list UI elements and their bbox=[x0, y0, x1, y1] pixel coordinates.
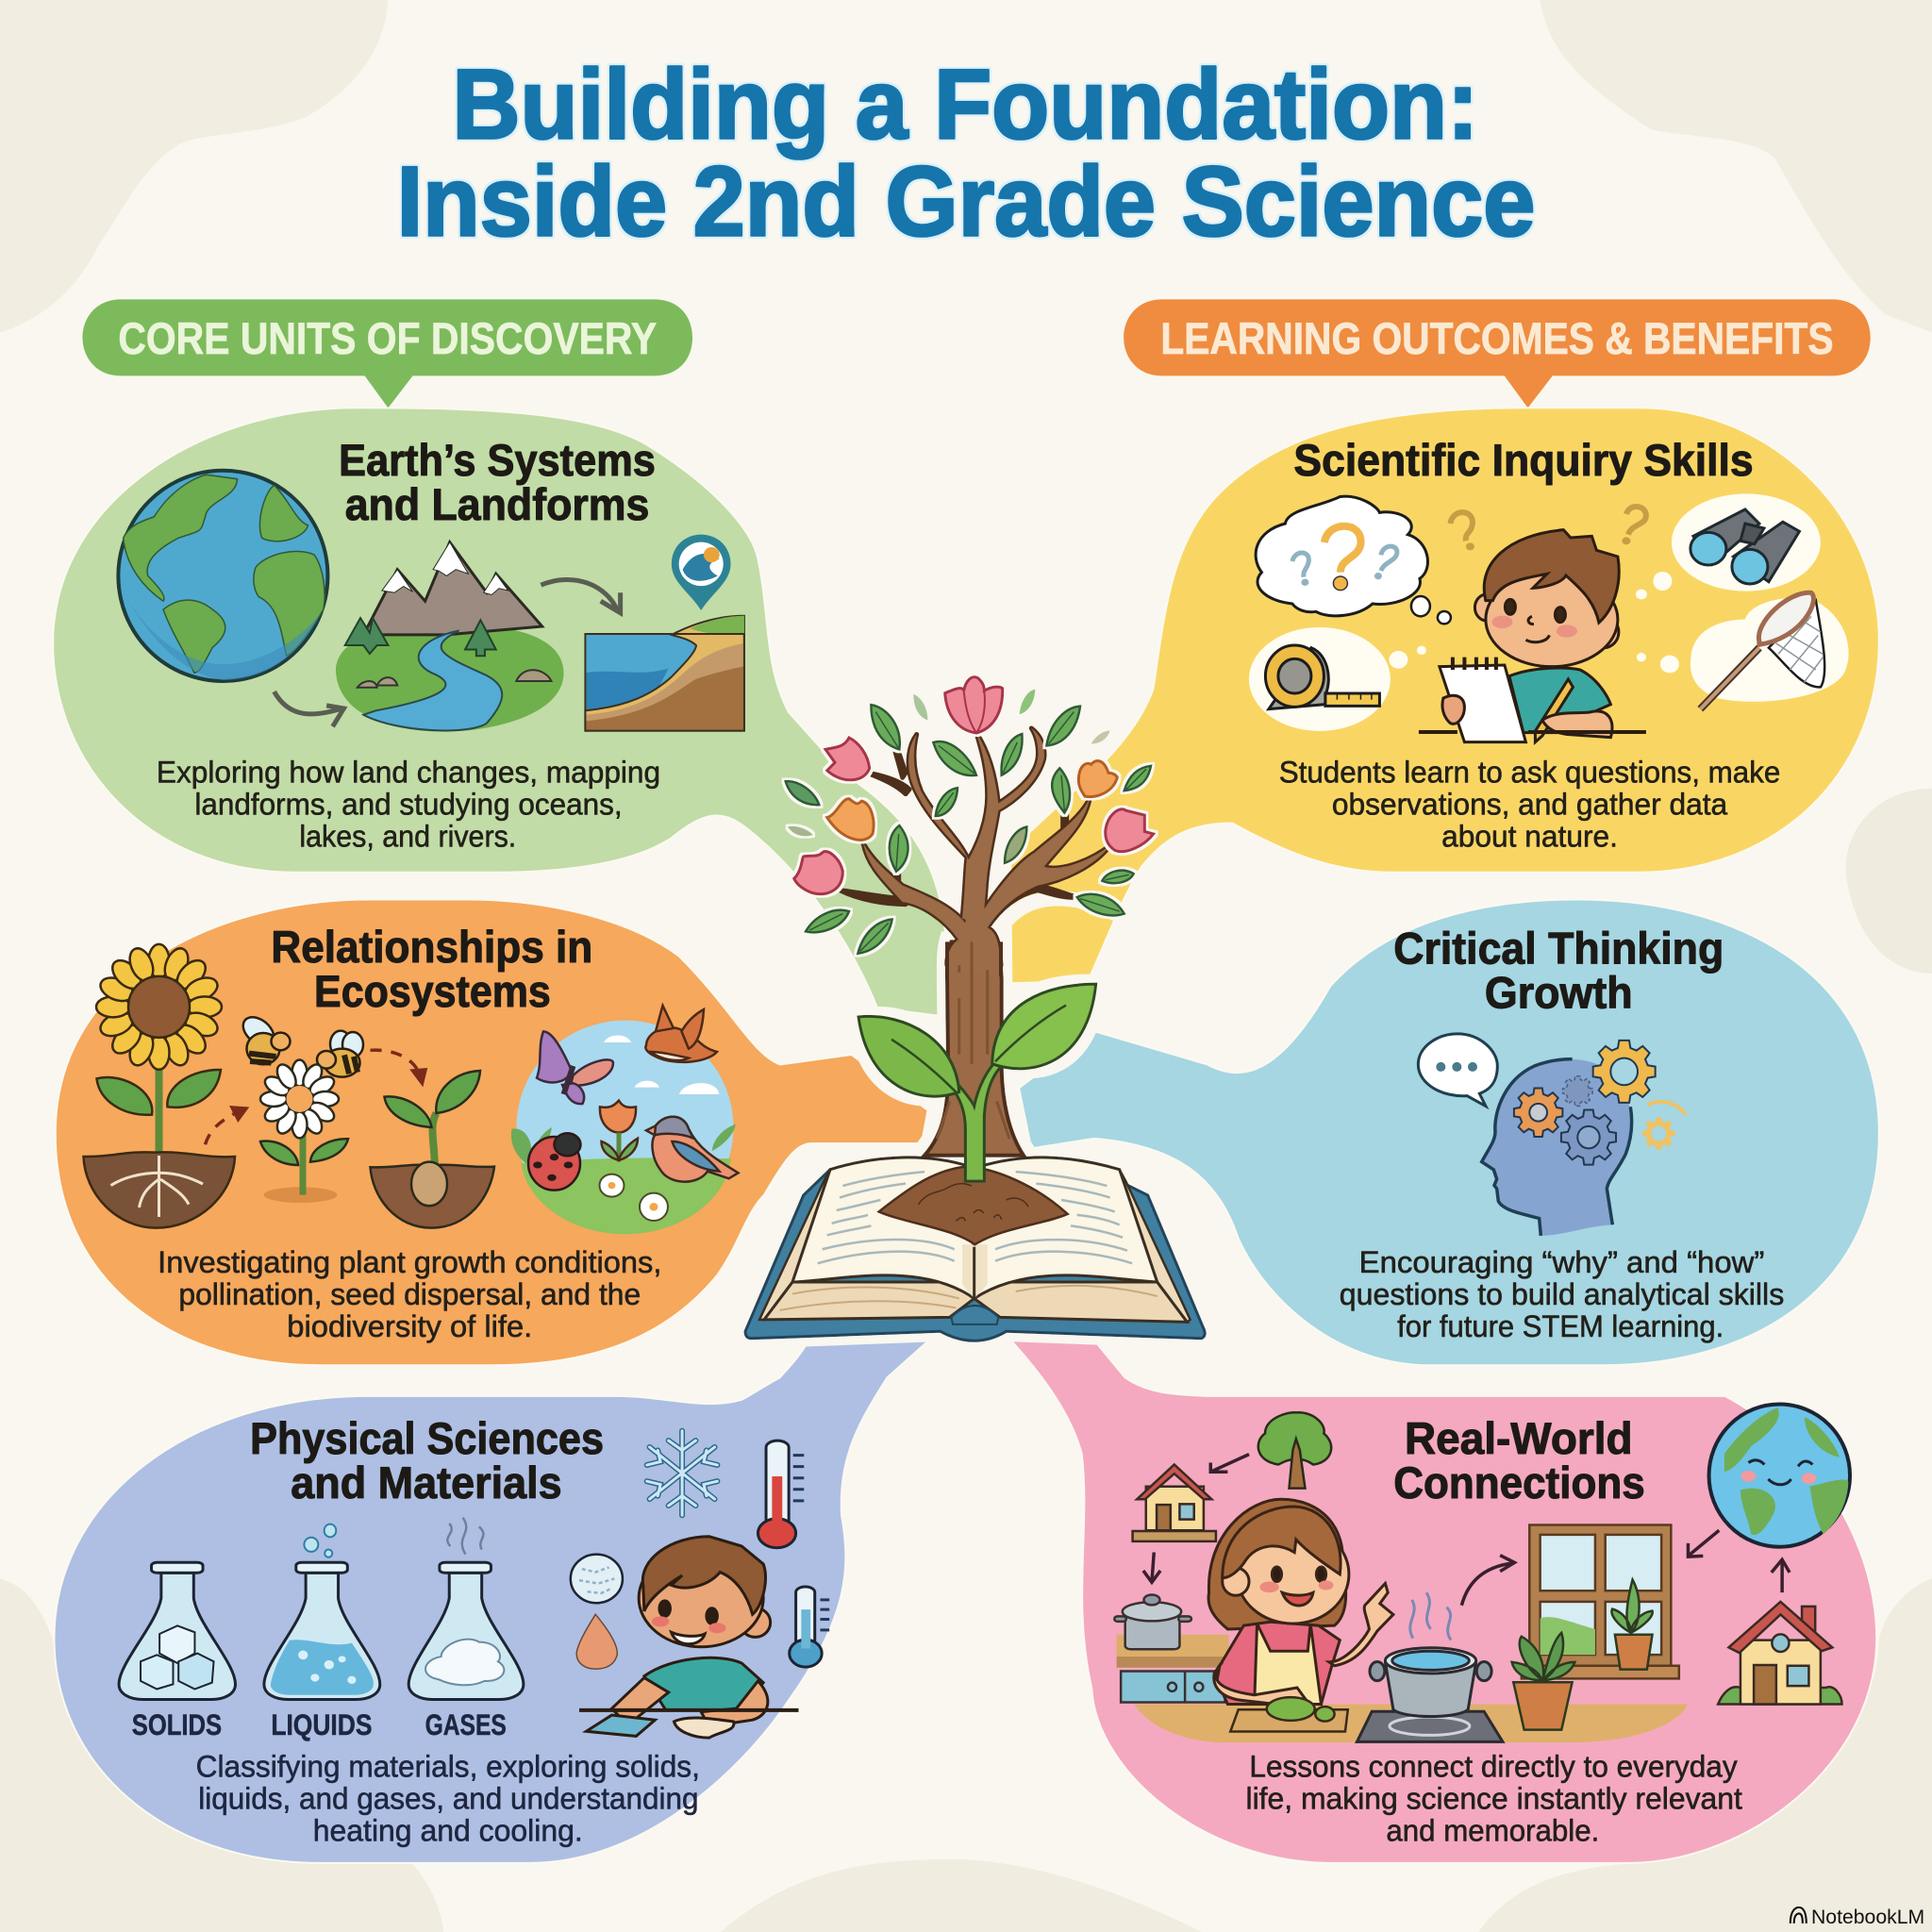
trunk base, book and sprout bbox=[745, 941, 1205, 1341]
state labels: LIQUIDS bbox=[271, 1708, 372, 1741]
body text: Investigating plant growth conditions, bbox=[158, 1244, 661, 1279]
icon: faded spinning gear bbox=[1642, 1102, 1686, 1150]
tree branches bbox=[840, 728, 1123, 975]
tree leaves bbox=[786, 690, 1151, 954]
icon: gear orange bbox=[1514, 1089, 1562, 1137]
icon: gear yellow bbox=[1593, 1041, 1656, 1103]
section header: learning outcomes and benefits: LEARNING OUTCOMES & BENEFITS bbox=[1160, 313, 1834, 363]
body text bbox=[157, 754, 660, 853]
icon: tree bbox=[1258, 1412, 1331, 1489]
state labels: SOLIDS bbox=[132, 1708, 222, 1741]
icon: arrow to coast bbox=[541, 579, 621, 613]
body text: pollination, seed dispersal, and the bbox=[178, 1276, 641, 1311]
body text: Lessons connect directly to everyday bbox=[1249, 1748, 1738, 1783]
icon: snowball and water drop bbox=[571, 1555, 623, 1669]
body text bbox=[196, 1748, 700, 1847]
icon: smiling boy bbox=[579, 1537, 798, 1738]
heading bbox=[1393, 923, 1724, 1017]
body text: Students learn to ask questions, make bbox=[1279, 754, 1780, 789]
illustration: head with gears bbox=[1418, 1034, 1686, 1236]
panel: physical sciences and materials bbox=[54, 1337, 933, 1863]
heading: Real-World bbox=[1405, 1413, 1633, 1463]
icon: cold thermometer bbox=[790, 1587, 829, 1667]
icon: arrows bbox=[1143, 1455, 1790, 1606]
title: Building a Foundation: bbox=[452, 49, 1478, 159]
icon: map pin bbox=[672, 535, 731, 610]
icon: tape measure bbox=[1265, 645, 1379, 709]
heading bbox=[271, 922, 592, 1016]
heading bbox=[339, 435, 656, 529]
icon: arrow to landforms bbox=[275, 691, 343, 726]
icon: hot thermometer bbox=[758, 1441, 804, 1548]
heading: Earth’s Systems bbox=[339, 435, 656, 485]
panel: relationships in ecosystems bbox=[56, 899, 928, 1365]
body text: lakes, and rivers. bbox=[299, 818, 516, 853]
body text: Classifying materials, exploring solids, bbox=[196, 1748, 700, 1783]
illustration: plants and pollinators bbox=[84, 944, 738, 1234]
panel: critical thinking growth bbox=[1019, 899, 1879, 1365]
body text: landforms, and studying oceans, bbox=[194, 786, 623, 821]
heading: and Materials bbox=[291, 1457, 562, 1507]
body text: Encouraging “why” and “how” bbox=[1359, 1244, 1764, 1279]
tree blossoms bbox=[794, 677, 1154, 894]
icon: mountains and river bbox=[336, 542, 564, 732]
icon: sunflower with roots bbox=[84, 944, 235, 1228]
tree crown: leaves and blossoms bbox=[786, 677, 1154, 954]
panel: scientific inquiry skills bbox=[1010, 408, 1879, 983]
icon: small house bbox=[1133, 1464, 1216, 1541]
section header: core units of discovery: CORE UNITS OF DISCOVERY bbox=[118, 313, 657, 363]
body text bbox=[158, 1244, 661, 1343]
body text: life, making science instantly relevant bbox=[1245, 1780, 1742, 1815]
body text bbox=[1279, 754, 1780, 853]
icon: sprouting seed bbox=[370, 1071, 494, 1228]
icon: head silhouette bbox=[1482, 1059, 1632, 1236]
icon: gear small bbox=[1562, 1076, 1592, 1106]
body text bbox=[1245, 1748, 1742, 1847]
heading bbox=[250, 1413, 604, 1507]
icon: girl cooking bbox=[1208, 1499, 1393, 1704]
panel: earth's systems and landforms bbox=[53, 408, 946, 1017]
icon: flask with liquids bbox=[264, 1524, 380, 1700]
icon: speech bubble bbox=[1418, 1034, 1497, 1107]
icon: nature scene bbox=[511, 1006, 738, 1234]
icon: floating question marks bbox=[1450, 507, 1646, 550]
icon: windowsill plant bbox=[1612, 1580, 1653, 1670]
state labels bbox=[132, 1708, 507, 1741]
illustration: states of matter bbox=[119, 1431, 829, 1738]
icon: thought cloud with question marks bbox=[1256, 496, 1451, 624]
sprout bbox=[858, 984, 1096, 1181]
soil mound bbox=[879, 1167, 1068, 1244]
panel shape: green bbox=[53, 408, 946, 1017]
icon: butterfly net bbox=[1700, 592, 1824, 709]
icon: counter top bbox=[1134, 1704, 1688, 1742]
body text: biodiversity of life. bbox=[287, 1308, 532, 1343]
heading: Physical Sciences bbox=[250, 1413, 604, 1463]
icon: flask with gases bbox=[408, 1518, 524, 1700]
body text: for future STEM learning. bbox=[1397, 1308, 1724, 1343]
icon: dashed arrows bbox=[206, 1050, 425, 1144]
icon: bees bbox=[237, 1014, 363, 1077]
icon: flask with solids bbox=[119, 1562, 235, 1700]
open book bbox=[745, 1158, 1205, 1341]
icon: left counter with pot bbox=[1114, 1595, 1229, 1703]
body text: Exploring how land changes, mapping bbox=[157, 754, 660, 789]
icon: gear blue bbox=[1561, 1110, 1616, 1165]
illustration: kitchen science bbox=[1114, 1404, 1850, 1742]
panel shape: pink bbox=[1007, 1336, 1876, 1863]
heading: Critical Thinking bbox=[1393, 923, 1724, 973]
body text: questions to build analytical skills bbox=[1340, 1276, 1784, 1311]
heading: Relationships in bbox=[271, 922, 592, 972]
illustration: globe, landforms and coast bbox=[118, 471, 744, 732]
heading: and Landforms bbox=[345, 479, 649, 529]
illustration: curious child with tools bbox=[1249, 493, 1849, 742]
heading: Ecosystems bbox=[314, 966, 551, 1016]
heading: Growth bbox=[1485, 967, 1633, 1017]
body text: liquids, and gases, and understanding bbox=[198, 1780, 699, 1815]
central illustration: tree growing from an open book bbox=[745, 677, 1205, 1341]
icon: daisy bbox=[260, 1059, 348, 1203]
icon: coastline cross-section bbox=[585, 616, 744, 731]
icon: potted plant bbox=[1512, 1633, 1574, 1730]
body text: and memorable. bbox=[1386, 1812, 1599, 1847]
lower trunk bbox=[924, 941, 1024, 1156]
title bbox=[397, 49, 1535, 257]
icon: globe bbox=[118, 471, 327, 681]
body text: observations, and gather data bbox=[1332, 786, 1728, 821]
panel shape: periwinkle bbox=[54, 1337, 933, 1863]
section header: core units of discovery bbox=[83, 299, 692, 408]
icon: smiling earth bbox=[1709, 1404, 1850, 1547]
icon: cutting board and greens bbox=[1230, 1697, 1348, 1732]
panel shape: teal bbox=[1019, 899, 1879, 1365]
heading bbox=[1393, 1413, 1645, 1507]
body text bbox=[1340, 1244, 1784, 1343]
icon: house with chimney bbox=[1718, 1602, 1842, 1704]
section header: learning outcomes and benefits bbox=[1124, 299, 1871, 408]
notebooklm logo: NotebookLM bbox=[1811, 1907, 1924, 1928]
icon: binoculars bbox=[1690, 509, 1799, 584]
heading: Scientific Inquiry Skills bbox=[1293, 435, 1754, 485]
icon: stove and boiling pot bbox=[1357, 1592, 1503, 1741]
panel: real-world connections bbox=[1007, 1336, 1876, 1863]
panel shape: yellow bbox=[1010, 408, 1879, 983]
icon: white bubbles bbox=[1249, 493, 1849, 731]
icon: window bbox=[1522, 1524, 1679, 1678]
body text: heating and cooling. bbox=[313, 1812, 583, 1847]
state labels: GASES bbox=[425, 1708, 507, 1741]
panel shape: orange bbox=[56, 899, 928, 1365]
icon: snowflake bbox=[647, 1431, 717, 1515]
heading: Connections bbox=[1393, 1457, 1645, 1507]
title: Inside 2nd Grade Science bbox=[397, 146, 1535, 257]
body text: about nature. bbox=[1441, 818, 1618, 853]
icon: boy writing on notepad bbox=[1419, 530, 1646, 742]
